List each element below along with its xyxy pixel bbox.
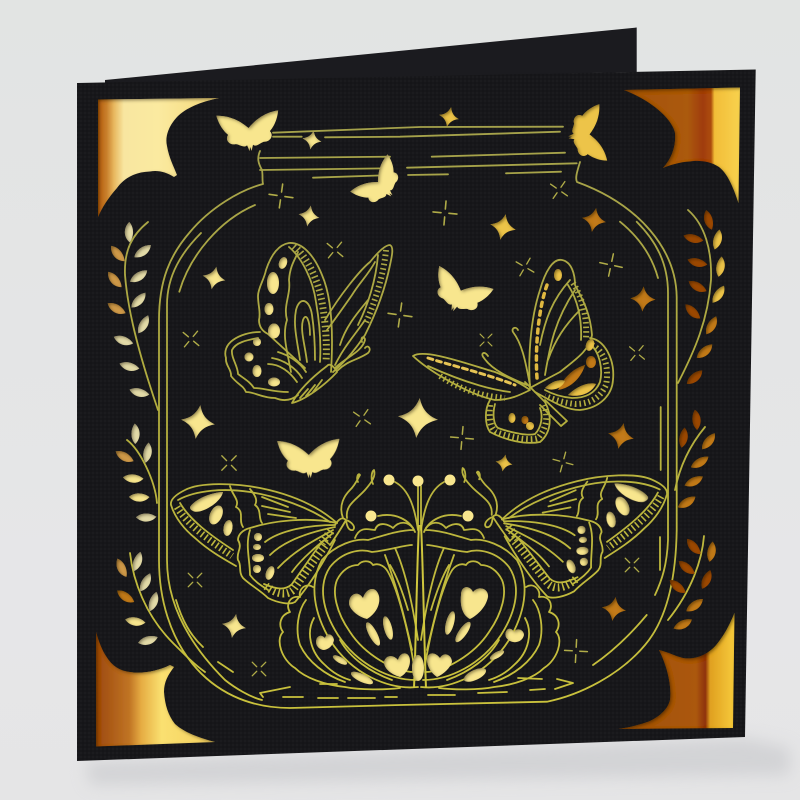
foil corner: bottom left — [96, 632, 215, 746]
moth foil hearts and drops — [316, 587, 524, 687]
foil corner: bottom right — [618, 613, 734, 729]
butterfly: upper left — [225, 243, 392, 403]
foil leaves — [106, 210, 729, 646]
jar outline — [159, 127, 677, 708]
jar lid lines — [260, 127, 577, 178]
central moth — [280, 474, 559, 689]
moth right half — [421, 474, 559, 689]
butterfly: lower right — [462, 459, 671, 601]
butterfly: lower left — [171, 470, 375, 603]
thin sparkle stars — [177, 176, 651, 683]
moth body — [414, 525, 426, 688]
leaf stems — [125, 210, 711, 672]
jar highlights — [176, 205, 661, 672]
moth centre ball — [412, 476, 424, 486]
jar outer wall — [159, 151, 677, 708]
moth left half — [280, 474, 418, 689]
card front panel — [77, 70, 756, 761]
foil corner: top right — [624, 88, 740, 203]
card shadow — [85, 738, 790, 785]
jar inner wall — [167, 222, 668, 700]
foil corner: top left — [98, 98, 219, 217]
card back panel — [105, 28, 637, 84]
jar bottom dashes — [260, 678, 573, 698]
small foil butterflies — [216, 104, 607, 479]
foil stars — [179, 105, 656, 640]
butterfly: upper right — [413, 260, 613, 443]
